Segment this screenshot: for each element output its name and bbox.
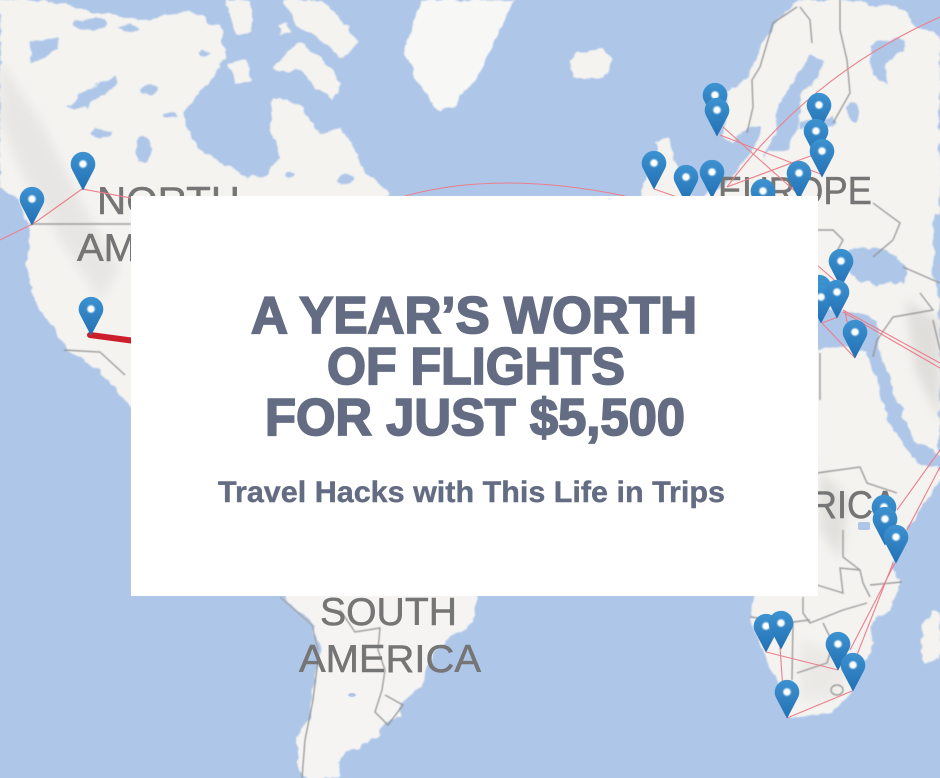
label: South: SOUTH	[320, 591, 457, 634]
pin: Johannesburg	[826, 632, 850, 670]
pin: Phoenix	[79, 297, 103, 335]
subtitle: Travel Hacks with This Life in Trips	[218, 476, 725, 509]
land: Baltic Sea	[762, 55, 824, 158]
label: America: AMERICA	[77, 227, 259, 270]
pin: Turkey	[825, 280, 849, 318]
title: A YEAR’S WORTH	[251, 287, 697, 345]
pin: Namibia 2	[769, 611, 793, 649]
title: FOR JUST $5,500	[265, 389, 685, 447]
land: Black Sea	[848, 248, 906, 284]
panel: title card	[131, 196, 818, 596]
pin: Germany	[751, 179, 775, 217]
pin: Greece cluster 2	[811, 280, 835, 318]
highlighted flight route	[90, 335, 135, 341]
pin: Norway north	[703, 83, 727, 121]
land: Africa	[700, 325, 940, 717]
pin: Bulgaria	[829, 249, 853, 287]
pin: Greece cluster 1	[807, 275, 831, 313]
pin: Greece cluster 3	[809, 285, 833, 323]
pin: Namibia 1	[754, 614, 778, 652]
pin: Netherlands	[700, 160, 724, 198]
land: Greenland	[405, 0, 515, 110]
pin: Norway south	[705, 98, 729, 136]
pin: England	[674, 165, 698, 203]
land: Madagascar	[919, 610, 940, 664]
land: Iceland	[570, 48, 614, 80]
lake in Patagonia	[348, 693, 356, 697]
land: North America	[0, 0, 390, 430]
land: South America	[280, 590, 480, 778]
title	[251, 287, 697, 447]
pin: Durban	[841, 653, 865, 691]
land: UK and Ireland	[640, 136, 690, 198]
pin: Finland	[807, 93, 831, 131]
pin: Vancouver	[20, 187, 44, 225]
land: Arctic islands	[226, 0, 360, 100]
pin: Tanzania	[884, 525, 908, 563]
land: Canadian lakes	[30, 18, 352, 184]
pin: Calgary	[71, 152, 95, 190]
label: South America second line: AMERICA	[299, 638, 481, 681]
land: Eurasia	[700, 0, 940, 455]
label: Europe: EUROPE	[718, 170, 872, 213]
pin: Latvia	[810, 139, 834, 177]
title: OF FLIGHTS	[327, 338, 625, 396]
pin: Kenya 2	[873, 507, 897, 545]
pin: Kenya 1	[872, 495, 896, 533]
land: Lake Ladoga	[846, 102, 860, 122]
label: North: NORTH	[97, 180, 240, 223]
label: Africa: AFRICA	[765, 484, 897, 527]
pin: Ireland	[642, 151, 666, 189]
lake: Victoria	[858, 522, 870, 530]
land: White Sea	[870, 35, 905, 85]
pin: Poland	[787, 161, 811, 199]
pin: Cape Town	[775, 680, 799, 718]
location pins	[20, 83, 908, 718]
pin: Egypt	[843, 320, 867, 358]
land: Red Sea	[866, 350, 918, 458]
land: Gulf of Finland	[800, 118, 835, 130]
land: Caspian Sea	[933, 215, 940, 300]
continent labels	[77, 170, 897, 681]
pin: Estonia	[804, 119, 828, 157]
